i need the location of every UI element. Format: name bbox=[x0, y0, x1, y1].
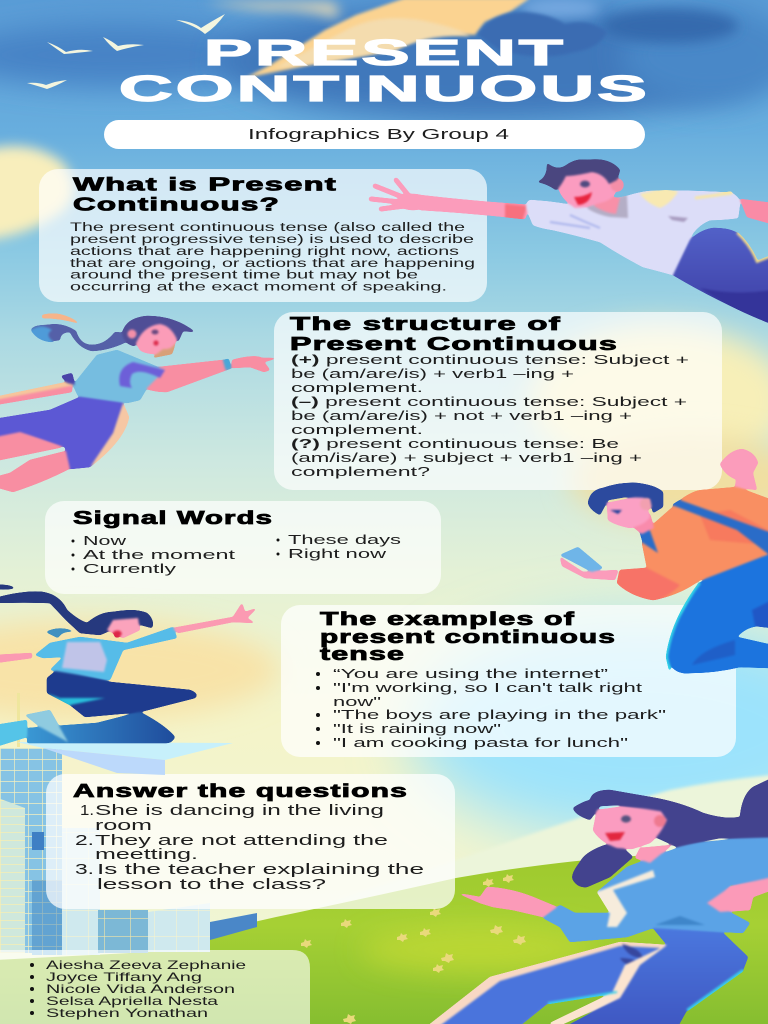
signal list right: Right now bbox=[288, 546, 387, 561]
numbered questions: 3. bbox=[75, 861, 94, 878]
head bbox=[558, 172, 616, 208]
definition text: The present continuous tense (also called the bbox=[70, 220, 465, 234]
example sentences: "I am cooking pasta for lunch" bbox=[333, 735, 628, 750]
example sentences: "The boys are playing in the park" bbox=[333, 707, 666, 722]
subtitle pill: Infographics By Group 4 bbox=[248, 127, 509, 143]
character: boy in orange hoodie with phone bbox=[560, 449, 768, 673]
signal list left: Now bbox=[83, 533, 127, 548]
definition text: occurring at the exact moment of speaking. bbox=[70, 280, 447, 294]
member names: Nicole Vida Anderson bbox=[46, 982, 235, 996]
ponytail bbox=[31, 324, 126, 351]
numbered questions: They are not attending the bbox=[95, 832, 388, 849]
right arm and hand bbox=[130, 360, 232, 392]
heading: Answer the questions bbox=[73, 781, 408, 801]
pointing arm bbox=[457, 887, 557, 917]
member names bbox=[30, 958, 247, 1020]
signal list left: Currently bbox=[83, 561, 177, 576]
panel: structure of present continuous bbox=[274, 312, 722, 490]
hoodie bbox=[617, 487, 768, 600]
panel: what is present continuous bbox=[39, 169, 487, 302]
left arm bbox=[0, 653, 32, 663]
back hair bbox=[640, 778, 768, 847]
t-shirt bbox=[526, 191, 740, 275]
formula text: (–) present continuous tense: Subject + bbox=[291, 394, 687, 409]
heading: Continuous? bbox=[73, 194, 280, 214]
heading: The examples of bbox=[320, 609, 576, 629]
example sentences: "It is raining now" bbox=[333, 721, 501, 736]
numbered questions bbox=[75, 802, 424, 893]
heading: Present Continuous bbox=[290, 334, 618, 354]
panel: group members bbox=[0, 950, 310, 1024]
character: girl pointing on the hill bbox=[425, 778, 768, 1024]
icon: flowers on the hill bbox=[301, 872, 749, 1024]
clouds at top bbox=[0, 0, 768, 240]
heading: The structure of bbox=[290, 314, 562, 334]
heading bbox=[73, 174, 337, 214]
example sentences: “You are using the internet” bbox=[333, 666, 608, 681]
example sentences: "I'm working, so I can't talk right bbox=[333, 680, 642, 695]
icon: paper plane bbox=[17, 742, 233, 775]
character: girl jumping on paper plane bbox=[0, 585, 257, 747]
example sentences: now" bbox=[333, 694, 381, 709]
hand bbox=[560, 557, 618, 580]
trousers leg one bbox=[425, 942, 667, 1024]
right hand bbox=[707, 877, 768, 912]
formula text: complement. bbox=[291, 380, 423, 395]
trousers bbox=[673, 228, 768, 324]
member names: Aiesha Zeeva Zephanie bbox=[46, 958, 247, 972]
signal list left bbox=[72, 533, 236, 576]
neck and face bbox=[635, 845, 672, 863]
definition text: present progressive tense) is used to describe bbox=[70, 232, 474, 246]
definition text: around the present time but may not be bbox=[70, 268, 418, 282]
formula text bbox=[291, 352, 689, 479]
lower leg bbox=[27, 712, 175, 743]
member names: Joyce Tiffany Ang bbox=[46, 970, 202, 984]
definition text: that are ongoing, or actions that are happening bbox=[70, 256, 475, 270]
title: PRESENT bbox=[204, 32, 566, 73]
trousers bbox=[667, 553, 768, 673]
heading: tense bbox=[320, 644, 405, 664]
backpack straps bbox=[672, 500, 768, 557]
hill and distant light band bbox=[0, 775, 768, 1024]
left lock of hair bbox=[572, 845, 633, 887]
character: girl with ponytail and skirt bbox=[0, 314, 278, 492]
formula text: (?) present continuous tense: Be bbox=[291, 436, 619, 451]
character: boy flying at top right bbox=[371, 159, 768, 324]
heading bbox=[320, 609, 616, 664]
building illustration bbox=[0, 693, 257, 955]
head bbox=[607, 496, 650, 528]
heading: Signal Words bbox=[73, 508, 273, 528]
shoes bbox=[25, 710, 68, 742]
icon: birds bbox=[27, 14, 225, 89]
formula text: (+) present continuous tense: Subject + bbox=[291, 352, 689, 367]
raised arm and fist bbox=[735, 470, 757, 490]
title: CONTINUOUS bbox=[119, 68, 650, 109]
member names: Selsa Apriella Nesta bbox=[46, 994, 219, 1008]
head bbox=[107, 618, 140, 638]
numbered questions: 1. bbox=[80, 802, 94, 819]
formula text: complement. bbox=[291, 422, 423, 437]
right arm and hand bbox=[173, 603, 257, 633]
arm and hand bbox=[371, 180, 530, 219]
signal list left: At the moment bbox=[83, 547, 236, 562]
panel: signal words bbox=[45, 501, 441, 594]
blouse bbox=[73, 350, 165, 403]
signal list right: These days bbox=[288, 532, 402, 547]
panel: examples bbox=[281, 605, 736, 757]
numbered questions: meetting. bbox=[95, 846, 198, 863]
hair bbox=[0, 592, 153, 635]
subtitle pill bbox=[104, 120, 645, 149]
panel: answer the questions bbox=[46, 774, 455, 909]
heading bbox=[290, 314, 618, 354]
head bbox=[134, 322, 178, 354]
definition text: actions that are happening right now, actions bbox=[70, 244, 459, 258]
formula text: (am/is/are) + subject + verb1 –ing + bbox=[291, 450, 642, 465]
phone bbox=[560, 547, 603, 572]
numbered questions: She is dancing in the living bbox=[95, 802, 384, 819]
member names: Stephen Yonathan bbox=[46, 1006, 208, 1020]
heading: present continuous bbox=[320, 627, 616, 647]
numbered questions: 2. bbox=[75, 832, 94, 849]
title bbox=[119, 32, 650, 109]
shirt bbox=[543, 838, 768, 942]
trousers leg two bbox=[563, 928, 748, 1024]
formula text: be (am/are/is) + verb1 –ing + bbox=[291, 366, 574, 381]
fringe hair bbox=[573, 790, 667, 820]
legs bbox=[0, 432, 63, 461]
jacket bbox=[35, 627, 177, 680]
numbered questions: lesson to the class? bbox=[97, 876, 326, 893]
numbered questions: Is the teacher explaining the bbox=[97, 861, 424, 878]
left arm bbox=[0, 381, 72, 405]
formula text: complement? bbox=[291, 464, 430, 479]
skirt bbox=[90, 403, 129, 467]
definition text bbox=[70, 220, 475, 294]
formula text: be (am/are/is) + not + verb1 –ing + bbox=[291, 408, 632, 423]
example sentences bbox=[316, 666, 666, 750]
heading: What is Present bbox=[73, 174, 337, 194]
neck bbox=[632, 514, 654, 534]
upper trousers bbox=[47, 670, 197, 717]
signal list right bbox=[276, 532, 402, 561]
numbered questions: room bbox=[95, 817, 152, 834]
